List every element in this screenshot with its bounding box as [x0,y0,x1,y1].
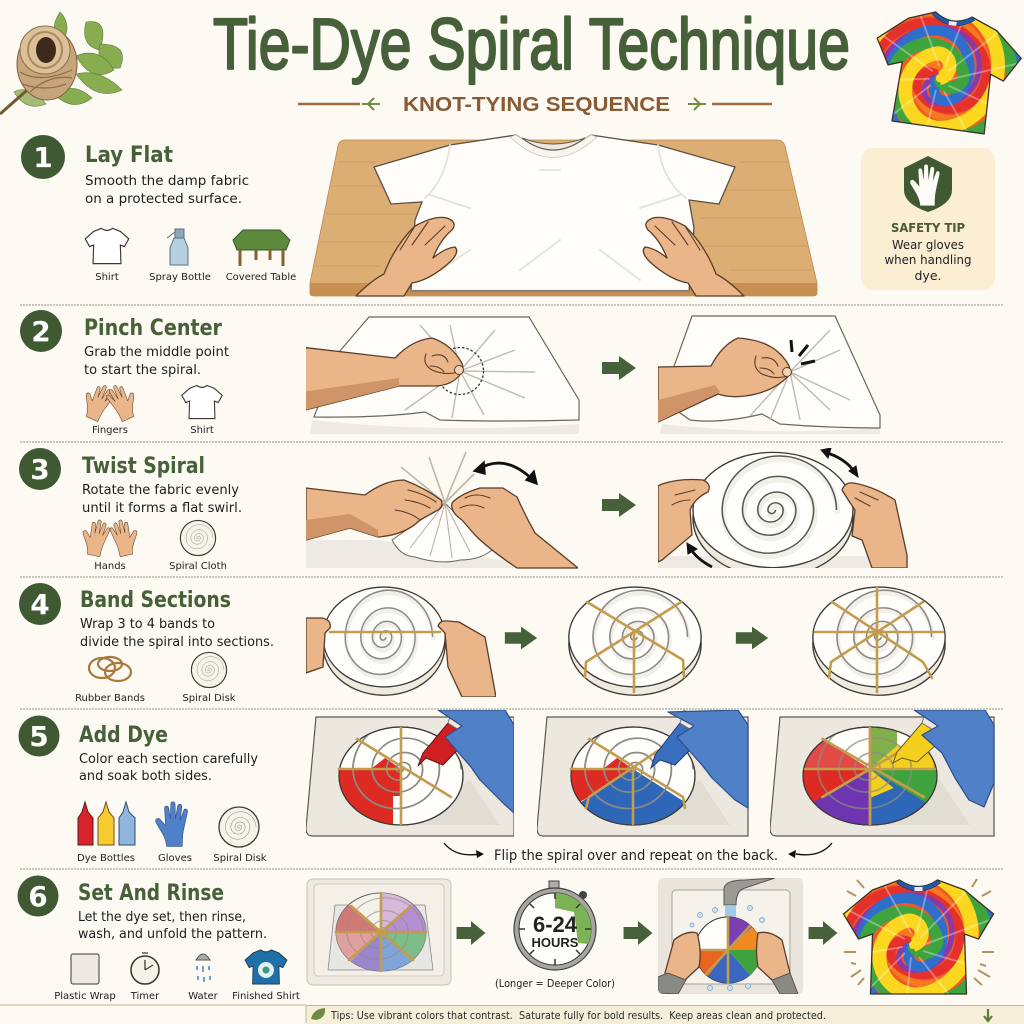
step 3 description [82,483,242,516]
panel: blue dye [537,710,748,846]
step 4 description: Wrap 3 to 4 bands to [80,617,215,632]
arrow [505,627,537,649]
panel: rinse in sink [658,878,803,994]
panel: pinch start [274,317,579,434]
step 3 description: until it forms a flat swirl. [82,501,242,516]
step 2 number badge [20,310,62,352]
illustration: finished tie-dye shirt [844,879,994,994]
step 5 supplies: Gloves [158,853,192,864]
step 1 heading: Lay Flat [85,143,173,168]
panel: first band [306,587,496,697]
panel: shirt on wooden table [310,135,817,296]
step 2 description: to start the spiral. [84,363,201,378]
arrow [602,493,636,517]
arrow [457,921,485,945]
note: flip the spiral: Flip the spiral over and repeat on the back. [494,848,778,864]
step 2 heading: Pinch Center [84,316,222,341]
tips bar: Tips: Use vibrant colors that contrast. Saturate fully for bold results. Keep areas clean and protected. [330,1009,826,1022]
callout: safety tip: Wear gloves [892,237,964,252]
step 1 supplies: Spray Bottle [149,272,211,283]
step 3 heading: Twist Spiral [82,454,205,479]
step 3 number badge: 3 [30,453,50,486]
subtitle with ornaments: KNOT-TYING SEQUENCE [403,94,670,116]
step 4 supplies: Spiral Disk [182,693,236,704]
step 6 number badge: 6 [28,880,48,913]
step 5 description: Color each section carefully [79,752,258,767]
step 3 supplies [79,517,227,572]
step 6 number badge [18,876,58,916]
step 5 supplies: Dye Bottles [77,853,135,864]
step 4 supplies: Rubber Bands [75,693,145,704]
step 2 description: Grab the middle point [84,345,229,360]
step 1 supplies: Covered Table [226,272,296,283]
step 4 description [80,617,274,650]
step 6 description: Let the dye set, then rinse, [78,910,246,925]
panel: twist swirl [658,448,908,577]
step 1 supplies [85,228,296,283]
step 4 number badge [19,583,61,625]
step 1 supplies: Shirt [95,272,119,283]
step 3 number badge [19,448,61,490]
step 5 description: and soak both sides. [79,769,212,784]
step 4 description: divide the spiral into sections. [80,635,274,650]
step 3 supplies: Spiral Cloth [169,561,227,572]
icon: tie-dye t-shirt top right [866,4,1024,138]
step 1 number badge [21,135,65,179]
timer caption: (Longer = Deeper Color) [495,977,615,990]
note: flip the spiral [444,843,832,864]
step 4 number badge: 4 [30,588,50,621]
step 6 heading: Set And Rinse [78,881,224,906]
step 5 supplies [77,802,267,864]
timer: 6-24 hours: 6-24 [533,912,578,937]
step 5 number badge: 5 [29,720,49,753]
step 6 description [78,910,267,942]
panel: twist start [306,452,578,568]
arrow [736,627,768,649]
step 1 description: on a protected surface. [85,192,242,207]
step 1 description [85,174,249,207]
step 6 supplies: Finished Shirt [232,991,300,1002]
callout: safety tip [861,148,995,290]
arrow [624,921,652,945]
step 5 number badge [18,716,60,756]
tips bar [0,1005,1024,1024]
arrow [602,356,636,380]
panel: rainbow dye [770,710,994,836]
step 6 supplies: Water [188,991,219,1002]
step 2 number badge: 2 [31,315,51,348]
step 1 description: Smooth the damp fabric [85,174,249,189]
step 5 heading: Add Dye [79,723,168,748]
panel: red dye [306,710,514,836]
step 2 description [84,345,229,378]
step 2 supplies: Shirt [190,425,214,436]
timer: 6-24 hours: HOURS [532,935,579,950]
panel: all bands [813,587,945,695]
step 3 description: Rotate the fabric evenly [82,483,239,498]
step 5 description [79,752,258,784]
panel: pinch result [658,316,880,434]
step 6 supplies [54,950,300,1002]
step 2 supplies [78,380,222,436]
subtitle with ornaments [298,94,772,116]
step 4 supplies [75,652,236,704]
step 1 number badge: 1 [33,141,53,174]
timer: 6-24 hours [514,881,596,970]
step 3 supplies: Hands [94,561,126,572]
icon: twine ball with leaves [0,12,122,114]
step 6 description: wash, and unfold the pattern. [78,927,267,942]
callout: safety tip: when handling [884,252,972,267]
panel: wrapped disc in tray [307,879,451,985]
step 6 supplies: Timer [130,991,160,1002]
step 5 supplies: Spiral Disk [213,853,267,864]
panel: two crossed bands [569,587,701,695]
step 4 heading: Band Sections [80,588,231,613]
callout: safety tip: dye. [914,268,942,283]
callout: safety tip: SAFETY TIP [891,221,965,235]
title: Tie-Dye Spiral Technique [213,5,850,85]
arrow [809,921,837,945]
step 6 supplies: Plastic Wrap [54,991,116,1002]
step 2 supplies: Fingers [92,425,128,436]
